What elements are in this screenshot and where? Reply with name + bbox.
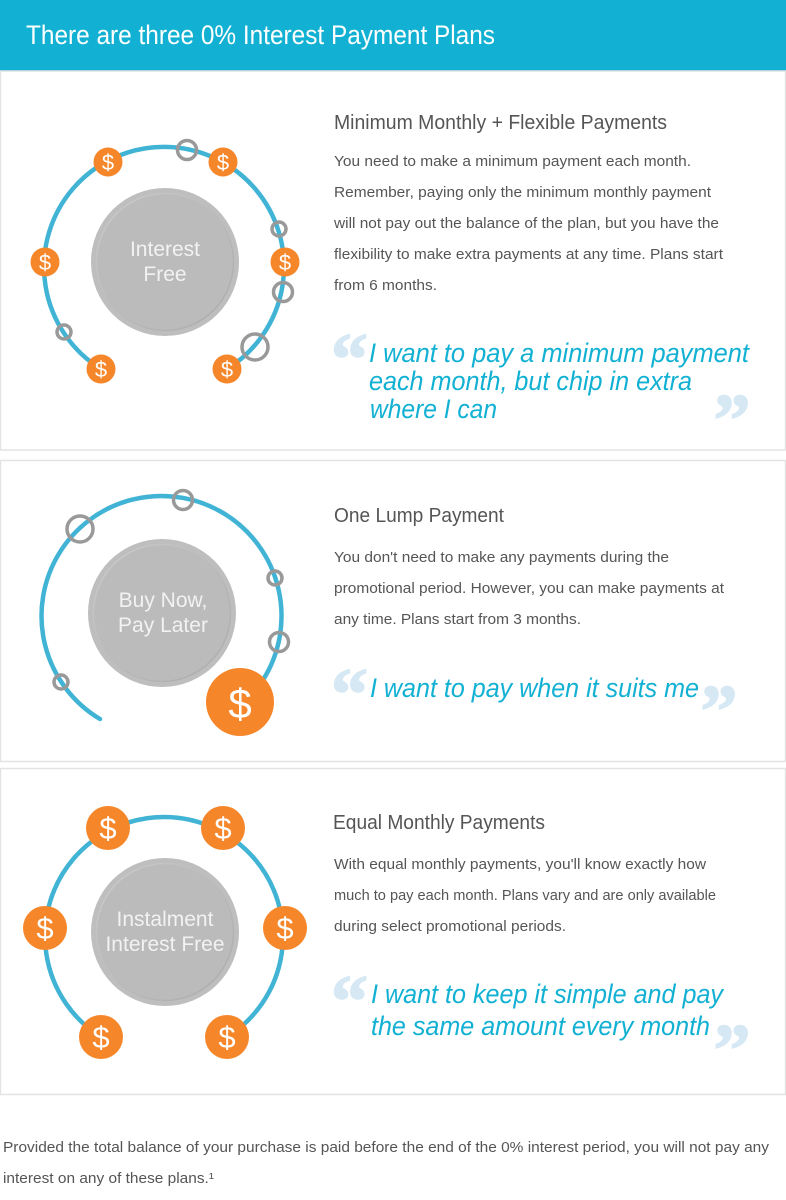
quote: “ [331, 319, 368, 401]
payment icons: $ [214, 811, 232, 846]
center coin: Pay Later [118, 614, 208, 637]
footnote: Provided the total balance of your purchase is paid before the end of the 0% interest period, you will not pay any [3, 1140, 770, 1156]
payment icons: $ [39, 250, 51, 275]
quote [331, 961, 750, 1092]
body text: much to pay each month. Plans vary and are only available [334, 888, 716, 904]
extra payment markers [57, 140, 292, 360]
body text: will not pay out the balance of the plan, but you have the [333, 216, 719, 232]
center coin [88, 539, 236, 687]
body text: You need to make a minimum payment each month. [334, 154, 691, 170]
quote: where I can [370, 394, 497, 424]
payment icons: $ [221, 357, 233, 382]
chart: buy now pay later cycle [42, 490, 289, 736]
panel: equal monthly payments plan [0, 768, 786, 1094]
center coin: Interest Free [105, 933, 225, 956]
chart: interest free cycle [30, 140, 300, 384]
quote: each month, but chip in extra [369, 366, 692, 396]
quote [331, 654, 738, 753]
quote: ” [714, 1010, 750, 1092]
body text: Remember, paying only the minimum monthly payment [334, 185, 711, 201]
payment icons: $ [217, 150, 229, 175]
center coin: Instalment [117, 908, 214, 931]
quote: I want to keep it simple and pay [371, 979, 724, 1009]
optional payment markers [54, 490, 288, 689]
body text: promotional period. However, you can make payments at [334, 581, 724, 597]
body text: You don't need to make any payments during the [334, 550, 669, 566]
payment icons: $ [36, 911, 54, 946]
panel: one lump payment plan [0, 460, 786, 762]
body text: With equal monthly payments, you'll know exactly how [334, 857, 707, 873]
payment icons: $ [102, 150, 114, 175]
body text [334, 550, 724, 628]
payment icons: $ [95, 357, 107, 382]
payment icons [30, 148, 300, 384]
body text: from 6 months. [334, 278, 437, 294]
chart: instalment cycle [23, 806, 307, 1059]
payment icons: $ [218, 1020, 236, 1055]
quote: I want to pay a minimum payment [369, 338, 750, 368]
lump payment icon: $ [228, 680, 252, 727]
payment icons: $ [99, 811, 117, 846]
payment icons [23, 806, 307, 1059]
heading: One Lump Payment [334, 505, 504, 527]
center coin [91, 188, 239, 336]
title: There are three 0% Interest Payment Plans [26, 20, 495, 50]
center coin: Interest [130, 238, 200, 261]
quote: the same amount every month [371, 1011, 710, 1041]
quote: “ [331, 961, 368, 1043]
quote: “ [331, 654, 368, 736]
center coin [91, 858, 239, 1006]
panel: minimum monthly plan [0, 71, 786, 462]
header banner [0, 0, 786, 71]
payment icons: $ [92, 1020, 110, 1055]
footnote [3, 1140, 770, 1187]
center coin: Free [143, 263, 187, 286]
heading: Equal Monthly Payments [333, 812, 545, 834]
body text [334, 857, 716, 935]
payment icons: $ [279, 250, 291, 275]
quote: ” [700, 671, 738, 753]
body text: during select promotional periods. [334, 919, 566, 935]
body text: flexibility to make extra payments at any time. Plans start [334, 247, 723, 263]
quote: ” [714, 380, 750, 462]
quote: I want to pay when it suits me [370, 673, 699, 703]
body text [333, 154, 723, 294]
heading: Minimum Monthly + Flexible Payments [334, 112, 667, 134]
footnote: interest on any of these plans.¹ [3, 1171, 214, 1187]
center coin: Buy Now, [119, 589, 207, 612]
payment icons: $ [276, 911, 294, 946]
quote [331, 319, 750, 462]
body text: any time. Plans start from 3 months. [334, 612, 581, 628]
lump payment icon [206, 668, 274, 736]
